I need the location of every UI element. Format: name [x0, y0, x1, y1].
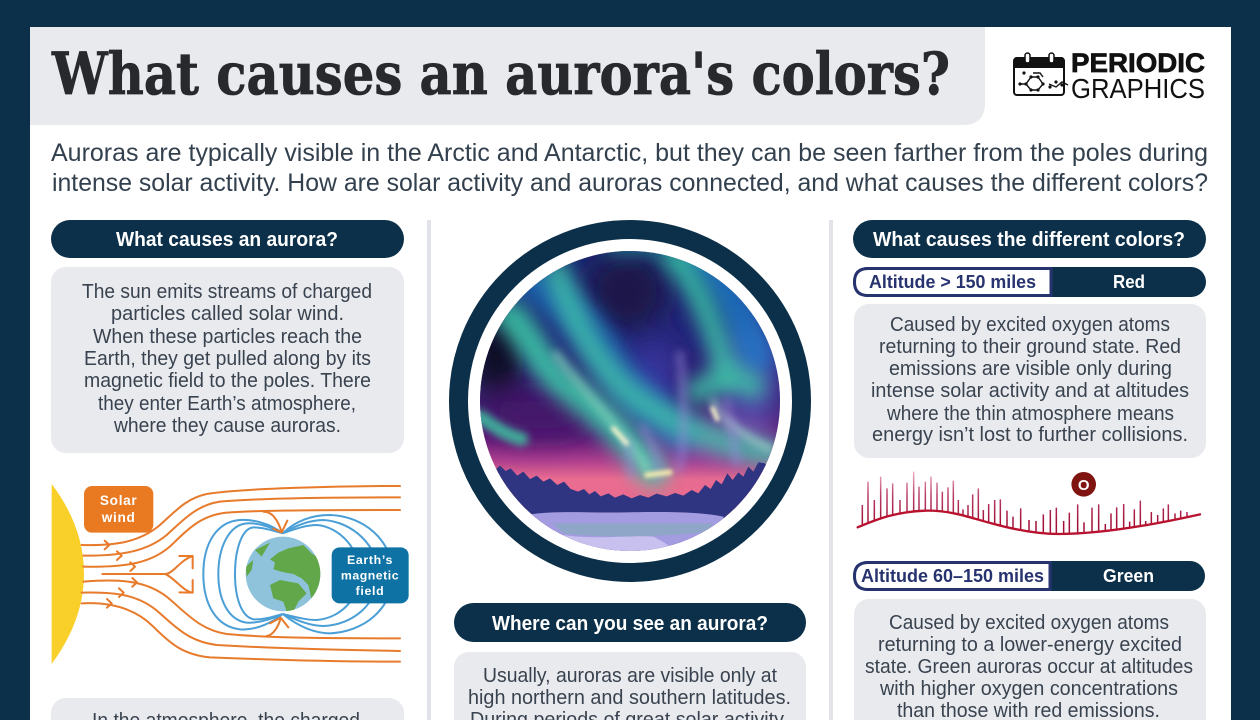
logo: Periodic Graphics: GRAPHICS — [1071, 73, 1205, 104]
snow and water — [527, 512, 727, 552]
column dividers — [427, 220, 431, 720]
text block: green emissions — [854, 599, 1206, 720]
label: Earth's magnetic field: field — [356, 584, 384, 598]
label: altitude 60 to 150 miles, green: Altitude 60–150 miles — [861, 565, 1044, 586]
logo: Periodic Graphics: PERIODIC — [1071, 48, 1205, 78]
chart: red emission spectrum wave — [858, 472, 1200, 534]
icon: earth — [246, 537, 322, 612]
icon: oxygen atom — [1071, 472, 1096, 497]
icon: oxygen atom: O — [1078, 477, 1090, 494]
text block: solar wind explanation: magnetic field to the poles. There — [84, 370, 371, 392]
text block: where auroras are visible: Usually, auroras are visible only at — [483, 665, 777, 687]
text block: green emissions: with higher oxygen concentrations — [879, 678, 1178, 700]
text block: green emissions: Caused by excited oxygen atoms — [889, 612, 1169, 634]
heading: what causes the different colors — [853, 220, 1206, 258]
panel: what causes the different colors — [853, 220, 1206, 720]
heading: what causes an aurora — [51, 220, 404, 258]
label: altitude above 150 miles, red — [853, 267, 1206, 297]
solar wind lines — [82, 486, 400, 662]
title banner — [30, 27, 985, 125]
text block: where auroras are visible — [454, 652, 806, 720]
text block: solar wind explanation: Earth, they get pulled along by its — [84, 348, 371, 370]
label: altitude 60 to 150 miles, green — [853, 561, 1205, 591]
label: Earth's magnetic field: magnetic — [341, 569, 399, 583]
image: aurora photograph in ring — [458, 230, 802, 572]
text block: solar wind explanation: The sun emits streams of charged — [82, 281, 372, 303]
title banner: What causes an aurora's colors? — [51, 40, 950, 108]
sky — [480, 251, 780, 551]
text block: solar wind explanation: where they cause auroras. — [113, 415, 341, 437]
logo: Periodic Graphics — [1014, 48, 1205, 104]
label: Earth's magnetic field: Earth’s — [347, 553, 393, 567]
label: altitude above 150 miles, red: Red — [1113, 271, 1145, 292]
text block: red emissions: emissions are visible only during — [889, 358, 1172, 380]
text block: where auroras are visible: high northern and southern latitudes. — [468, 687, 791, 709]
text block: solar wind explanation: they enter Earth’s atmosphere, — [98, 393, 356, 415]
text block: red emissions: Caused by excited oxygen atoms — [890, 314, 1170, 336]
intro text: intense solar activity. How are solar activity and auroras connected, and what causes the different colors? — [52, 169, 1208, 197]
text block: red emissions: where the thin atmosphere means — [886, 403, 1174, 425]
label: solar wind: wind — [101, 510, 136, 525]
trees — [496, 462, 766, 551]
panel: what causes an aurora — [51, 220, 409, 720]
panel: centre column — [454, 230, 806, 720]
heading: where can you see an aurora — [454, 603, 806, 642]
heading: what causes the different colors: What causes the different colors? — [873, 229, 1185, 251]
label: altitude 60 to 150 miles, green: Green — [1103, 565, 1154, 586]
label: solar wind: Solar — [100, 493, 137, 508]
text block: red emissions: returning to their ground state. Red — [879, 336, 1181, 358]
text block: solar wind explanation: particles called solar wind. — [111, 303, 344, 325]
text block: solar wind explanation — [51, 267, 404, 453]
intro text — [51, 139, 1208, 197]
text block: green emissions: state. Green auroras occur at altitudes — [865, 656, 1193, 678]
magnetic field lines — [203, 515, 393, 633]
text block: red emissions: intense solar activity and at altitudes — [871, 380, 1189, 402]
heading: what causes an aurora: What causes an aurora? — [116, 229, 338, 251]
intro text: Auroras are typically visible in the Arctic and Antarctic, but they can be seen farther from the poles during — [51, 139, 1208, 167]
text block: red emissions: energy isn’t lost to further collisions. — [872, 424, 1188, 446]
label: altitude above 150 miles, red: Altitude > 150 miles — [869, 271, 1036, 292]
label: Earth's magnetic field — [332, 547, 409, 603]
diagram: solar wind and magnetic field — [52, 484, 409, 664]
text block: in the atmosphere — [51, 698, 404, 720]
text block: green emissions: returning to a lower-energy excited — [878, 634, 1182, 656]
icon: sun — [52, 484, 84, 664]
text block: solar wind explanation: When these particles reach the — [93, 326, 362, 348]
text block: red emissions — [854, 304, 1206, 458]
label: solar wind — [84, 486, 153, 533]
heading: where can you see an aurora: Where can you see an aurora? — [492, 613, 768, 635]
aurora bands — [480, 247, 773, 475]
